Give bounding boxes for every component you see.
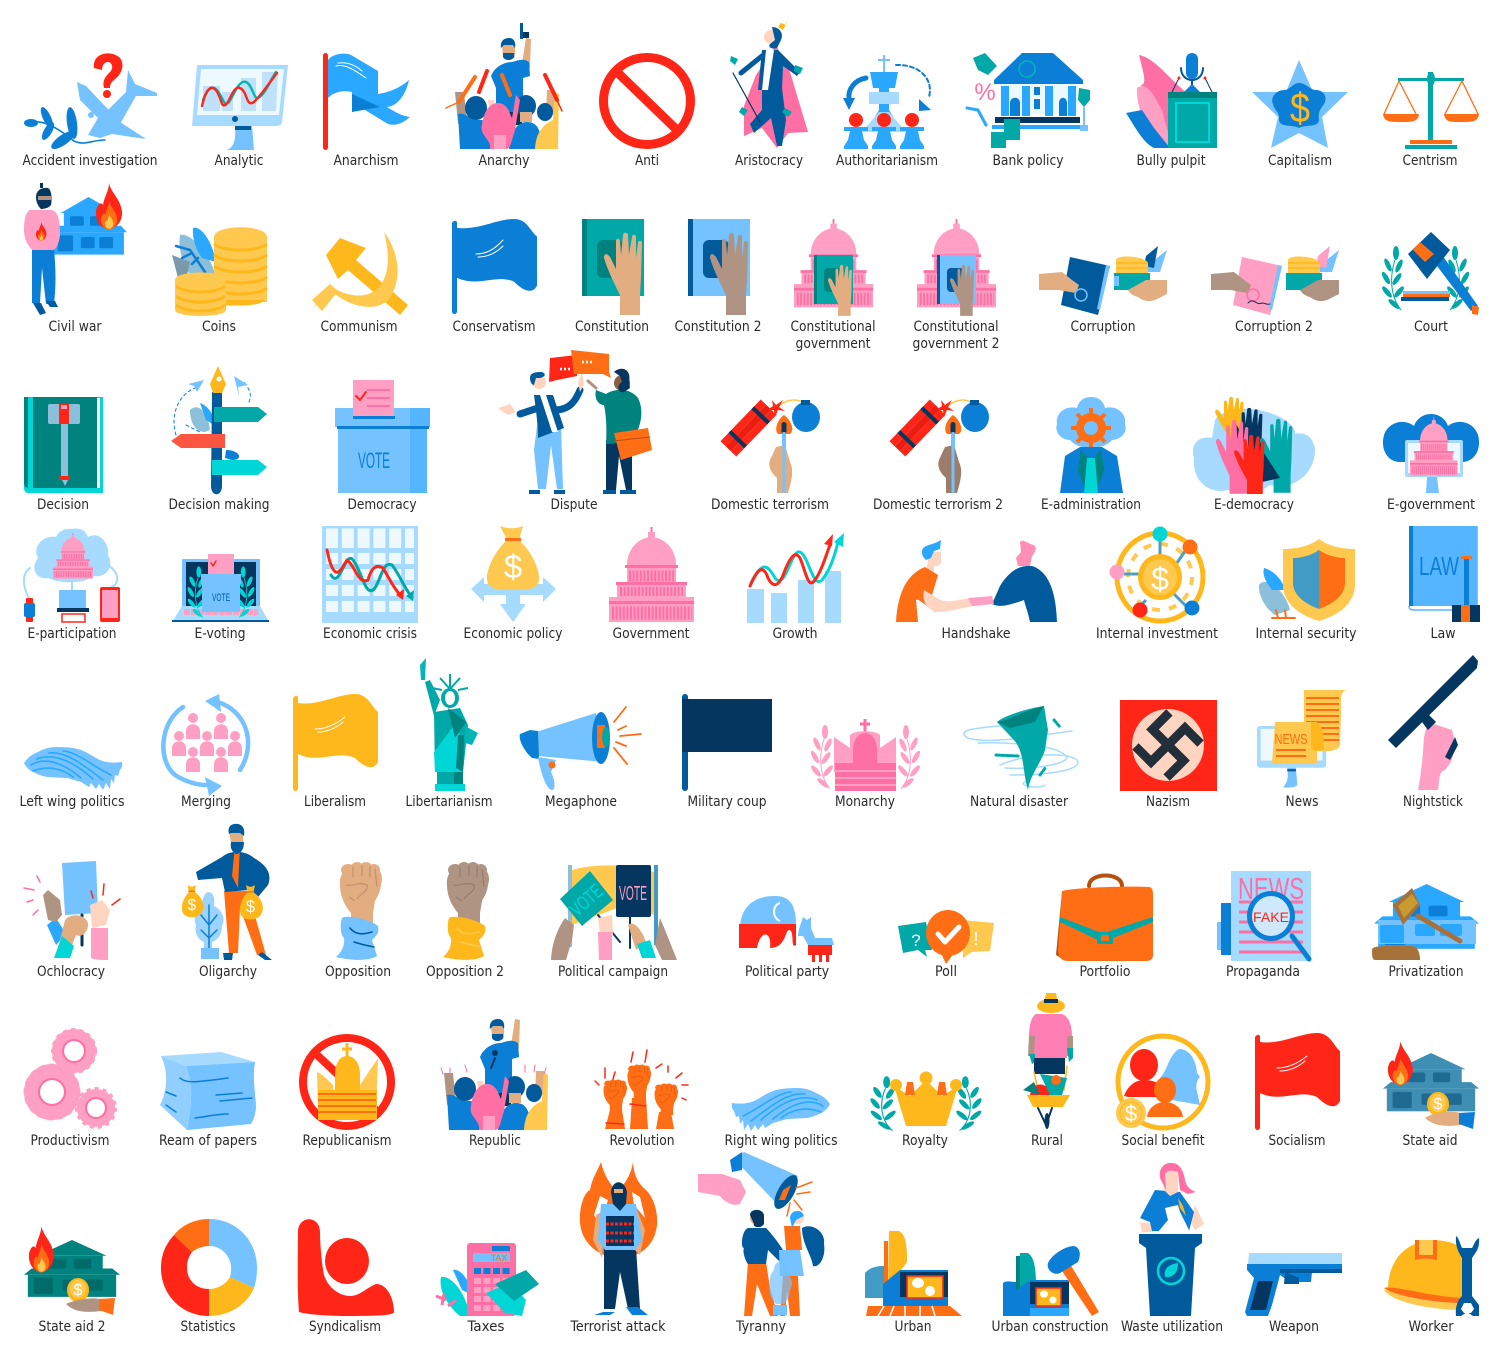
label: Revolution	[610, 1133, 674, 1149]
icon: Civil war	[24, 183, 127, 335]
label: Taxes	[466, 1319, 504, 1335]
icon: Poll	[898, 910, 994, 980]
icon: Taxes: TAX	[491, 1253, 507, 1263]
label: Analytic	[214, 153, 264, 169]
label: Republic	[469, 1133, 521, 1149]
icon: E-voting	[172, 554, 269, 642]
icon: Productivism	[26, 1030, 115, 1149]
icon: Coins	[172, 227, 267, 335]
icon: Political campaign: VOTE	[619, 883, 647, 905]
label: Dispute	[550, 497, 598, 513]
icon: State aid: $	[1434, 1096, 1443, 1113]
label: Authoritarianism	[836, 153, 938, 169]
label: Internal investment	[1096, 626, 1218, 642]
icon: E-democracy	[1193, 397, 1315, 513]
label: Royalty	[902, 1133, 949, 1149]
icon: Domestic terrorism 2	[873, 399, 1003, 513]
icon: Poll: !	[973, 929, 979, 949]
label: Libertarianism	[406, 794, 492, 810]
label: Centrism	[1402, 153, 1458, 169]
label: State aid 2	[38, 1319, 106, 1335]
label: Social benefit	[1122, 1133, 1205, 1149]
icon: Constitutional government	[790, 219, 876, 352]
icon: Taxes	[436, 1243, 539, 1335]
label: Democracy	[348, 497, 417, 513]
icon: State aid	[1383, 1041, 1479, 1149]
icon: Law	[1409, 526, 1480, 642]
icon: Aristocracy	[730, 20, 808, 169]
label: Natural disaster	[970, 794, 1069, 810]
label: Court	[1414, 319, 1448, 335]
icon: Monarchy	[809, 719, 922, 810]
icon: Social benefit	[1116, 1036, 1208, 1149]
icon: Left wing politics	[20, 747, 124, 810]
label: Statistics	[180, 1319, 236, 1335]
icon: Syndicalism	[298, 1219, 394, 1335]
label: Waste utilization	[1121, 1319, 1223, 1335]
icon: Conservatism	[452, 219, 537, 335]
icon: Internal investment	[1096, 526, 1218, 642]
label: Handshake	[942, 626, 1011, 642]
icon: Urban construction	[992, 1246, 1108, 1335]
label: Nazism	[1146, 794, 1190, 810]
icon: Decision making	[168, 366, 270, 513]
icon: Law: LAW	[1419, 551, 1459, 581]
icon: Anti	[604, 58, 690, 169]
label: Internal security	[1256, 626, 1357, 642]
label: Opposition	[325, 964, 391, 980]
icon: Political campaign	[551, 865, 677, 980]
icon: E-government	[1383, 414, 1479, 513]
icon: Capitalism: $	[1290, 84, 1310, 131]
icon: E-administration	[1041, 397, 1141, 513]
label: Anarchism	[334, 153, 398, 169]
label: Capitalism	[1268, 153, 1332, 169]
icon: Republicanism	[302, 1038, 392, 1149]
icon: Political campaign: VOTE	[566, 881, 607, 921]
icon: Accident investigation	[22, 53, 158, 169]
icon: Waste utilization	[1121, 1163, 1223, 1335]
label: Coins	[202, 319, 236, 335]
icon: Capitalism	[1252, 60, 1348, 169]
icon: Privatization	[1372, 884, 1479, 980]
icon: Constitution	[575, 219, 649, 335]
icon: Constitutional government 2: government 2	[912, 336, 1000, 352]
label: E-government	[1387, 497, 1475, 513]
icon: Military coup	[682, 694, 772, 810]
label: Law	[1430, 626, 1456, 642]
icon: Weapon	[1245, 1253, 1342, 1335]
icon: Constitutional government: government	[796, 336, 871, 352]
icon: Decision	[24, 397, 103, 513]
label: Republicanism	[302, 1133, 392, 1149]
icon: Propaganda: NEWS	[1238, 871, 1304, 906]
label: Government	[612, 626, 690, 642]
icon: Bank policy	[967, 53, 1090, 169]
label: Poll	[935, 964, 957, 980]
label: Socialism	[1268, 1133, 1326, 1149]
icon: News	[1257, 690, 1346, 810]
label: Political party	[745, 964, 830, 980]
label: Corruption	[1070, 319, 1136, 335]
icon: Poll: ?	[911, 931, 921, 950]
icon: Revolution	[595, 1050, 688, 1149]
label: Nightstick	[1403, 794, 1464, 810]
icon: Dispute	[498, 350, 652, 513]
label: Portfolio	[1080, 964, 1131, 980]
icon: Opposition	[325, 862, 391, 980]
icon: Analytic	[192, 65, 288, 169]
icon: Tyranny	[698, 1152, 824, 1335]
icon: Propaganda	[1217, 871, 1311, 980]
label: Political campaign	[558, 964, 668, 980]
icon: Megaphone	[520, 707, 641, 810]
label: Urban	[894, 1319, 932, 1335]
label: Conservatism	[452, 319, 536, 335]
icon: News: NEWS	[1274, 731, 1308, 748]
label: Rural	[1031, 1133, 1063, 1149]
label: Communism	[320, 319, 398, 335]
icon: Portfolio	[1056, 876, 1153, 980]
label: E-democracy	[1214, 497, 1295, 513]
icon: Urban	[865, 1231, 962, 1335]
icon: Authoritarianism	[836, 55, 938, 169]
label: Constitutional	[790, 319, 876, 335]
icon: Terrorist attack	[569, 1162, 666, 1335]
label: E-participation	[28, 626, 116, 642]
icon: Communism	[312, 232, 408, 335]
icon: Constitutional government 2	[912, 219, 1000, 352]
icon: Rural	[1023, 993, 1073, 1149]
label: Decision making	[168, 497, 270, 513]
icon: Political party	[739, 896, 834, 980]
label: Anarchy	[478, 153, 530, 169]
icon: Constitution 2	[674, 219, 762, 335]
label: Corruption 2	[1235, 319, 1313, 335]
label: Syndicalism	[309, 1319, 381, 1335]
icon: Statistics	[161, 1219, 257, 1335]
icon: Libertarianism	[406, 658, 492, 810]
icon: Socialism	[1255, 1033, 1340, 1149]
label: Worker	[1408, 1319, 1454, 1335]
icon: Anarchy	[446, 23, 562, 169]
icon: Economic crisis	[322, 526, 418, 642]
icon: Ream of papers	[159, 1052, 257, 1149]
label: Right wing politics	[724, 1133, 838, 1149]
label: Constitution	[575, 319, 649, 335]
icon: Natural disaster	[964, 706, 1078, 810]
icon: Court	[1380, 232, 1479, 335]
icon: Corruption	[1039, 246, 1167, 335]
label: Growth	[772, 626, 818, 642]
icon: Nightstick	[1388, 655, 1478, 810]
icon: Bully pulpit	[1126, 53, 1217, 169]
label: Propaganda	[1226, 964, 1300, 980]
icon: Domestic terrorism	[711, 399, 829, 513]
icon: Bank policy: %	[974, 79, 996, 106]
icon: Democracy: VOTE	[358, 448, 390, 473]
icon: Democracy	[335, 380, 430, 513]
label: Ochlocracy	[37, 964, 106, 980]
icon: Oligarchy	[182, 824, 272, 980]
label: Civil war	[48, 319, 102, 335]
label: News	[1286, 794, 1318, 810]
icon: Centrism	[1383, 72, 1479, 169]
label: Bank policy	[992, 153, 1064, 169]
label: Economic policy	[464, 626, 563, 642]
label: Ream of papers	[159, 1133, 257, 1149]
icon: E-participation	[24, 529, 120, 642]
icon: Worker	[1384, 1236, 1479, 1335]
label: State aid	[1402, 1133, 1458, 1149]
label: Decision	[37, 497, 89, 513]
label: Bully pulpit	[1136, 153, 1206, 169]
label: Constitution 2	[674, 319, 762, 335]
label: Privatization	[1388, 964, 1464, 980]
icon: Ochlocracy	[24, 861, 120, 980]
icon: Internal security	[1256, 539, 1357, 642]
label: Merging	[181, 794, 231, 810]
icon: E-voting: VOTE	[212, 592, 230, 604]
icon: Republic	[441, 1019, 548, 1149]
label: E-administration	[1041, 497, 1141, 513]
icon: State aid 2	[24, 1226, 120, 1335]
icon: Economic policy: $	[504, 548, 522, 585]
label: Aristocracy	[735, 153, 804, 169]
label: Left wing politics	[20, 794, 124, 810]
label: Constitutional	[914, 319, 998, 335]
label: Accident investigation	[22, 153, 158, 169]
label: E-voting	[194, 626, 246, 642]
icon: Growth	[747, 533, 844, 642]
label: Domestic terrorism	[711, 497, 829, 513]
label: Liberalism	[304, 794, 366, 810]
icon: Nazism	[1120, 700, 1217, 810]
icon: Right wing politics	[724, 1088, 838, 1149]
label: Monarchy	[835, 794, 896, 810]
label: Domestic terrorism 2	[873, 497, 1003, 513]
icon: Social benefit: $	[1125, 1101, 1137, 1126]
icon: Propaganda: FAKE	[1253, 909, 1289, 925]
icon: Handshake	[896, 540, 1057, 642]
label: Oligarchy	[199, 964, 258, 980]
icon: Corruption 2	[1211, 246, 1339, 335]
label: Productivism	[30, 1133, 110, 1149]
label: Megaphone	[545, 794, 617, 810]
icon: Government	[609, 527, 694, 642]
label: Opposition 2	[426, 964, 504, 980]
icon: State aid 2: $	[74, 1282, 83, 1299]
icon: Anarchism	[323, 53, 410, 169]
icon: Internal investment: $	[1151, 561, 1169, 597]
icon: Economic policy	[464, 526, 563, 642]
icon: Royalty	[869, 1072, 983, 1149]
icon: Merging	[163, 694, 248, 810]
icon: Opposition 2	[426, 862, 504, 980]
icon: Liberalism	[293, 694, 378, 810]
label: Tyranny	[735, 1319, 787, 1335]
label: Urban construction	[992, 1319, 1108, 1335]
label: Military coup	[688, 794, 766, 810]
label: Terrorist attack	[569, 1319, 666, 1335]
label: Weapon	[1269, 1319, 1319, 1335]
label: Economic crisis	[323, 626, 417, 642]
label: Anti	[635, 153, 659, 169]
